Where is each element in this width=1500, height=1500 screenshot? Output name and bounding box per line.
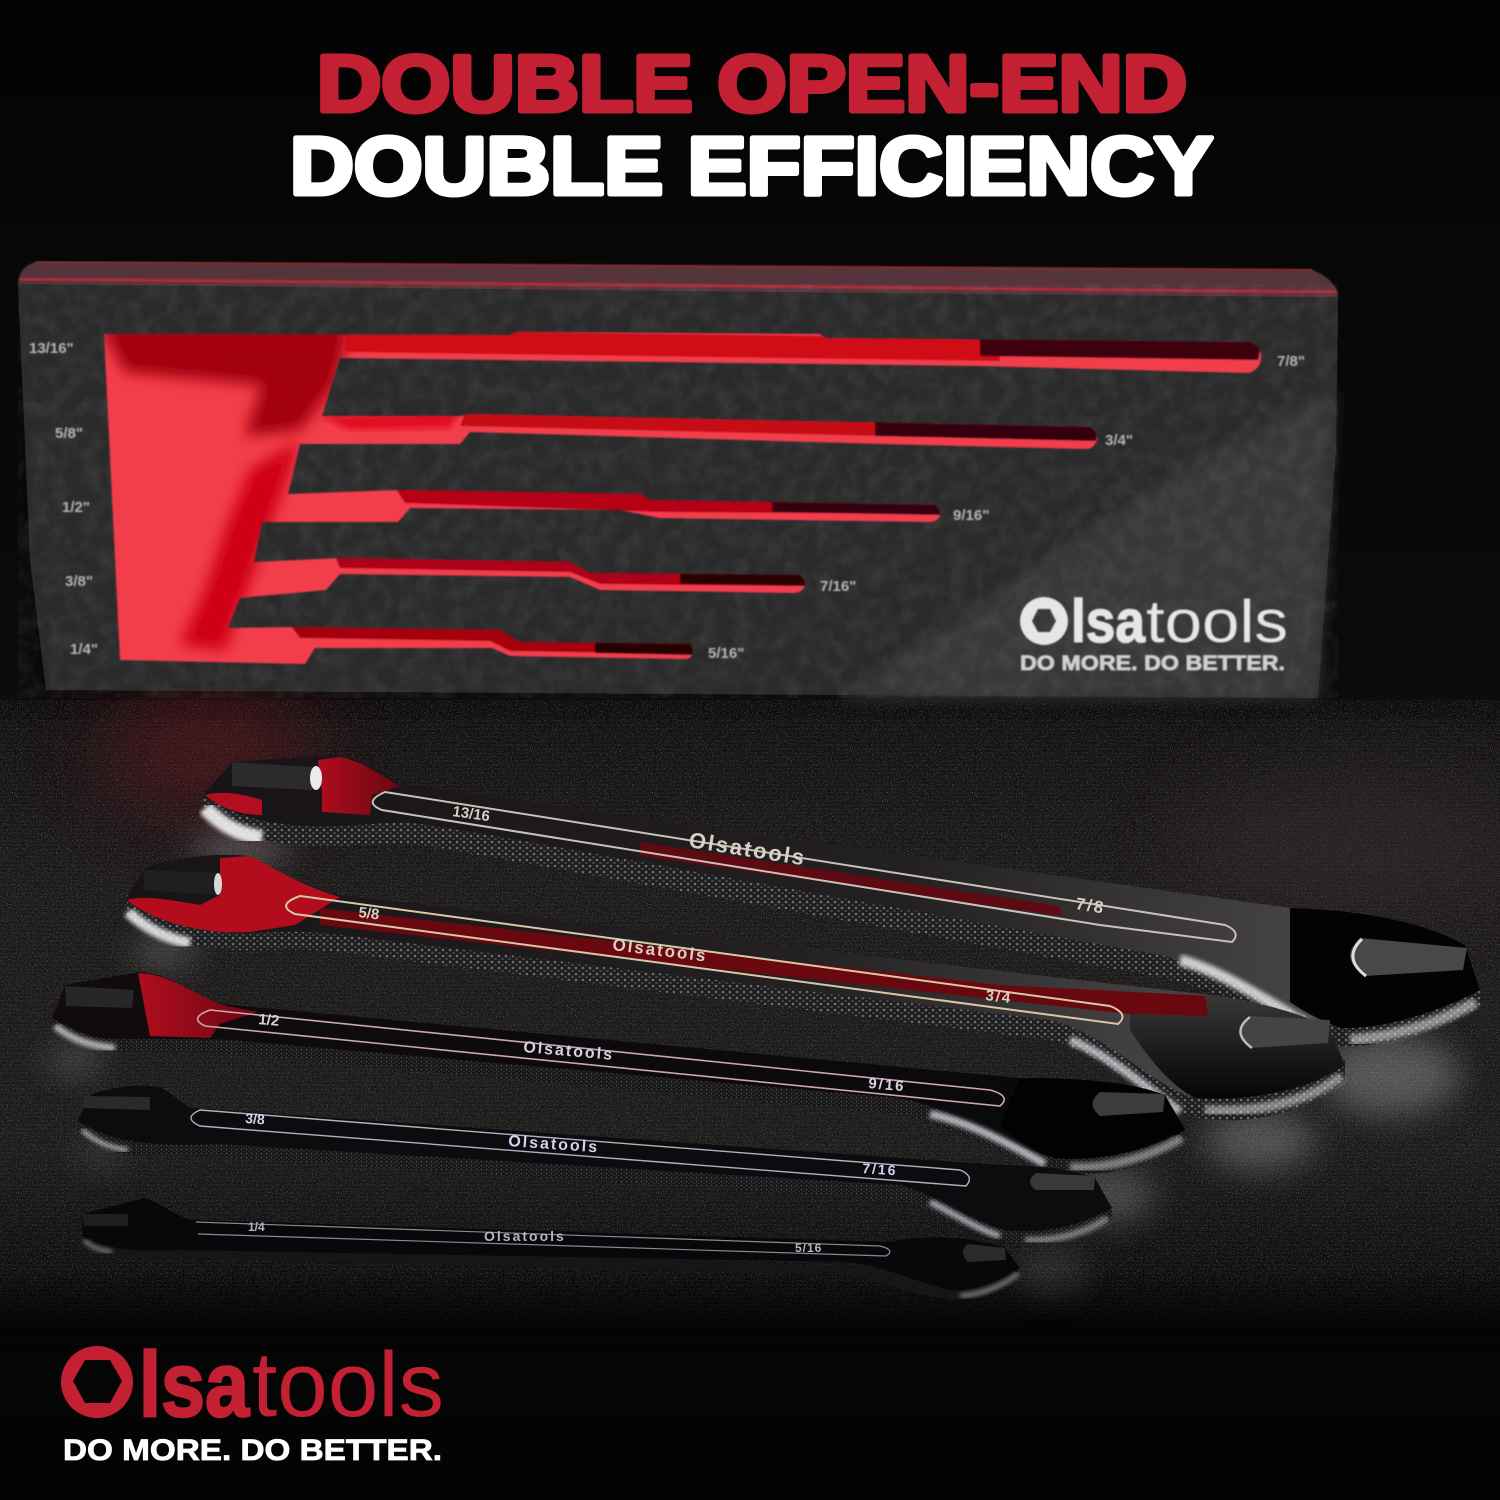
tray logo: lsa	[1071, 588, 1146, 655]
engraving: 9/16	[868, 1075, 906, 1095]
bright highlight	[1180, 960, 1318, 1030]
wrench 1: 13/16 x 7/8	[203, 755, 1480, 1046]
red shank stripe	[320, 908, 1210, 1016]
face	[78, 1086, 1112, 1231]
wordmark regular part: tools	[252, 1334, 444, 1436]
engraving: 13/16	[451, 803, 491, 825]
face	[82, 1198, 1020, 1290]
engraving	[248, 1220, 822, 1255]
red left head	[318, 757, 400, 815]
engraving	[358, 904, 1013, 1007]
red left head	[138, 973, 258, 1038]
edge band	[78, 1115, 1112, 1243]
bright highlight	[1070, 1040, 1180, 1112]
jaw block right	[1092, 1092, 1165, 1116]
engraving	[451, 803, 1107, 918]
tray logo	[1020, 588, 1288, 675]
tray logo: DO MORE. DO BETTER.	[1020, 652, 1285, 675]
tray size labels: 1/2"	[62, 499, 90, 516]
engraving: Olsatools	[612, 935, 709, 966]
bright highlight	[930, 1202, 1000, 1236]
jaw block left	[65, 986, 134, 1008]
tray size labels: 5/8"	[55, 425, 83, 442]
engraving	[245, 1110, 898, 1178]
red left head	[127, 856, 340, 932]
heading line 1: DOUBLE OPEN-END	[317, 39, 1187, 128]
tray logo: tools	[1146, 588, 1288, 655]
tray size labels	[29, 340, 1305, 662]
tray size labels: 3/8"	[65, 573, 93, 590]
engraving: 3/8	[245, 1110, 266, 1127]
tray size labels: 7/16"	[820, 578, 856, 595]
tagline: DO MORE. DO BETTER.	[63, 1434, 442, 1467]
wrench 2: 5/8 x 3/4	[125, 855, 1345, 1120]
engraving: 1/4	[248, 1220, 265, 1234]
title	[290, 39, 1213, 212]
engraving: 5/8	[358, 904, 380, 924]
jaw block	[143, 870, 216, 895]
engraving: 5/16	[795, 1241, 822, 1255]
wordmark bold part: lsa	[139, 1334, 250, 1436]
tray size labels: 5/16"	[708, 645, 744, 662]
engraving: 1/2	[258, 1011, 280, 1030]
panel: foam tray	[18, 262, 1338, 698]
wrench 5: 1/4 x 5/16	[82, 1198, 1020, 1300]
slot outline	[373, 792, 1236, 942]
engraving	[258, 1011, 906, 1095]
face	[52, 972, 1185, 1159]
tray size labels: 7/8"	[1277, 353, 1305, 370]
jaw blocks	[232, 762, 312, 790]
red wrench cavity	[100, 325, 1262, 664]
red reflection	[640, 842, 1062, 916]
wrench 4: 3/8 x 7/16	[78, 1086, 1112, 1243]
edge band	[125, 895, 1345, 1120]
tray size labels: 13/16"	[29, 340, 74, 357]
bright highlight	[930, 1114, 1045, 1164]
floor mat	[0, 680, 1500, 1350]
slot outline	[196, 1222, 890, 1256]
edge band	[203, 790, 1480, 1046]
brand logo	[61, 1334, 444, 1467]
engraving: 7/8	[1074, 894, 1107, 918]
cavity shadows	[100, 325, 1262, 655]
jaw blocks	[84, 1096, 150, 1110]
engraving: Olsatools	[508, 1133, 600, 1156]
black right head	[1290, 908, 1480, 1028]
jaw blocks	[82, 1214, 128, 1226]
engraving: 7/16	[862, 1160, 898, 1178]
engraving: Olsatools	[687, 827, 808, 870]
edge band	[82, 1230, 1020, 1300]
heading line 2: DOUBLE EFFICIENCY	[290, 121, 1213, 212]
icon: hex-nut letter O	[61, 1346, 133, 1418]
right head	[1130, 994, 1345, 1099]
face	[125, 855, 1345, 1099]
slot outline	[198, 1010, 1004, 1106]
tray size labels: 1/4"	[70, 641, 98, 658]
tray size labels: 9/16"	[953, 507, 989, 524]
wrench 3: 1/2 x 9/16	[52, 972, 1185, 1174]
jaw block right	[1239, 1016, 1330, 1048]
face	[203, 755, 1480, 1028]
tray front face	[18, 284, 1338, 698]
engraving: Olsatools	[484, 1228, 566, 1244]
right head	[1000, 1078, 1185, 1159]
slot outline	[191, 1110, 969, 1186]
engraving: Olsatools	[523, 1039, 615, 1064]
slot outline	[286, 896, 1123, 1024]
engraving: 3/4	[985, 987, 1013, 1007]
bright highlight	[960, 1274, 1018, 1296]
tray size labels: 3/4"	[1105, 432, 1133, 449]
tray top edge	[18, 262, 1338, 298]
edge band	[52, 1010, 1185, 1174]
floor reflections	[47, 836, 1460, 1292]
